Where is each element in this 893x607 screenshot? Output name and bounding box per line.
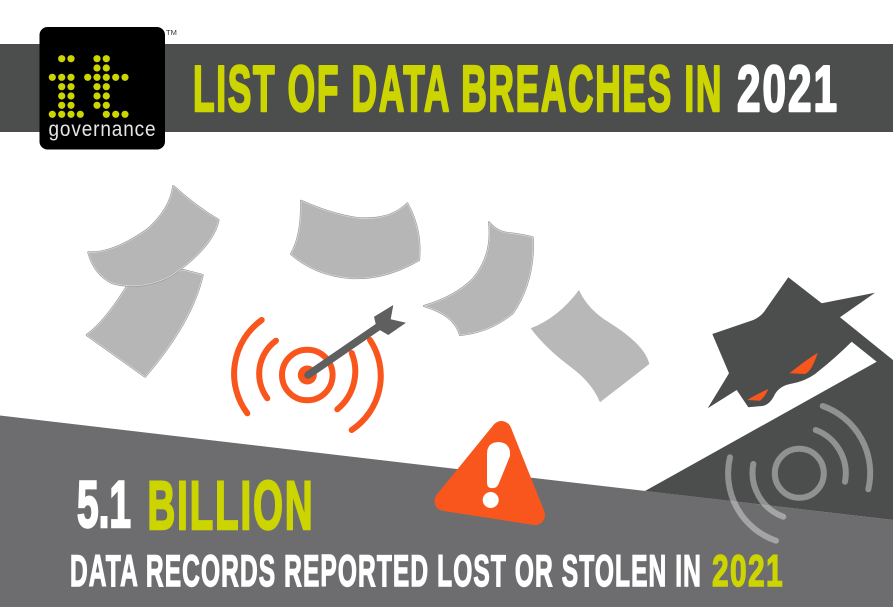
exclamation mark	[483, 442, 510, 508]
bottom grey panel	[0, 416, 893, 607]
paper: plain right	[531, 290, 649, 402]
paper: lower left	[87, 270, 203, 377]
signal rings icon	[728, 406, 870, 541]
statistic: 5.1 billion	[77, 467, 314, 544]
paper: top centre	[291, 201, 420, 278]
warning triangle icon	[444, 431, 535, 515]
hacker silhouette	[645, 277, 893, 520]
paper: centre right	[424, 222, 533, 335]
statistic: 5.1 billion: BILLION	[148, 467, 314, 544]
header band	[0, 44, 893, 132]
hacker left eye	[747, 389, 768, 401]
logo wordmark: governance	[48, 117, 156, 141]
statistic caption: 2021	[712, 547, 784, 596]
statistic: 5.1 billion: 5.1	[77, 467, 131, 541]
hacker right eye	[789, 353, 818, 374]
target rings	[234, 320, 381, 430]
logo dots	[49, 55, 129, 118]
target with arrow icon	[234, 305, 406, 430]
paper: upper left	[88, 186, 218, 286]
logo: it governance	[40, 27, 165, 150]
target centre	[298, 366, 317, 384]
arrow	[308, 305, 406, 375]
heading: 2021	[737, 53, 839, 125]
trademark: TM	[166, 28, 177, 37]
